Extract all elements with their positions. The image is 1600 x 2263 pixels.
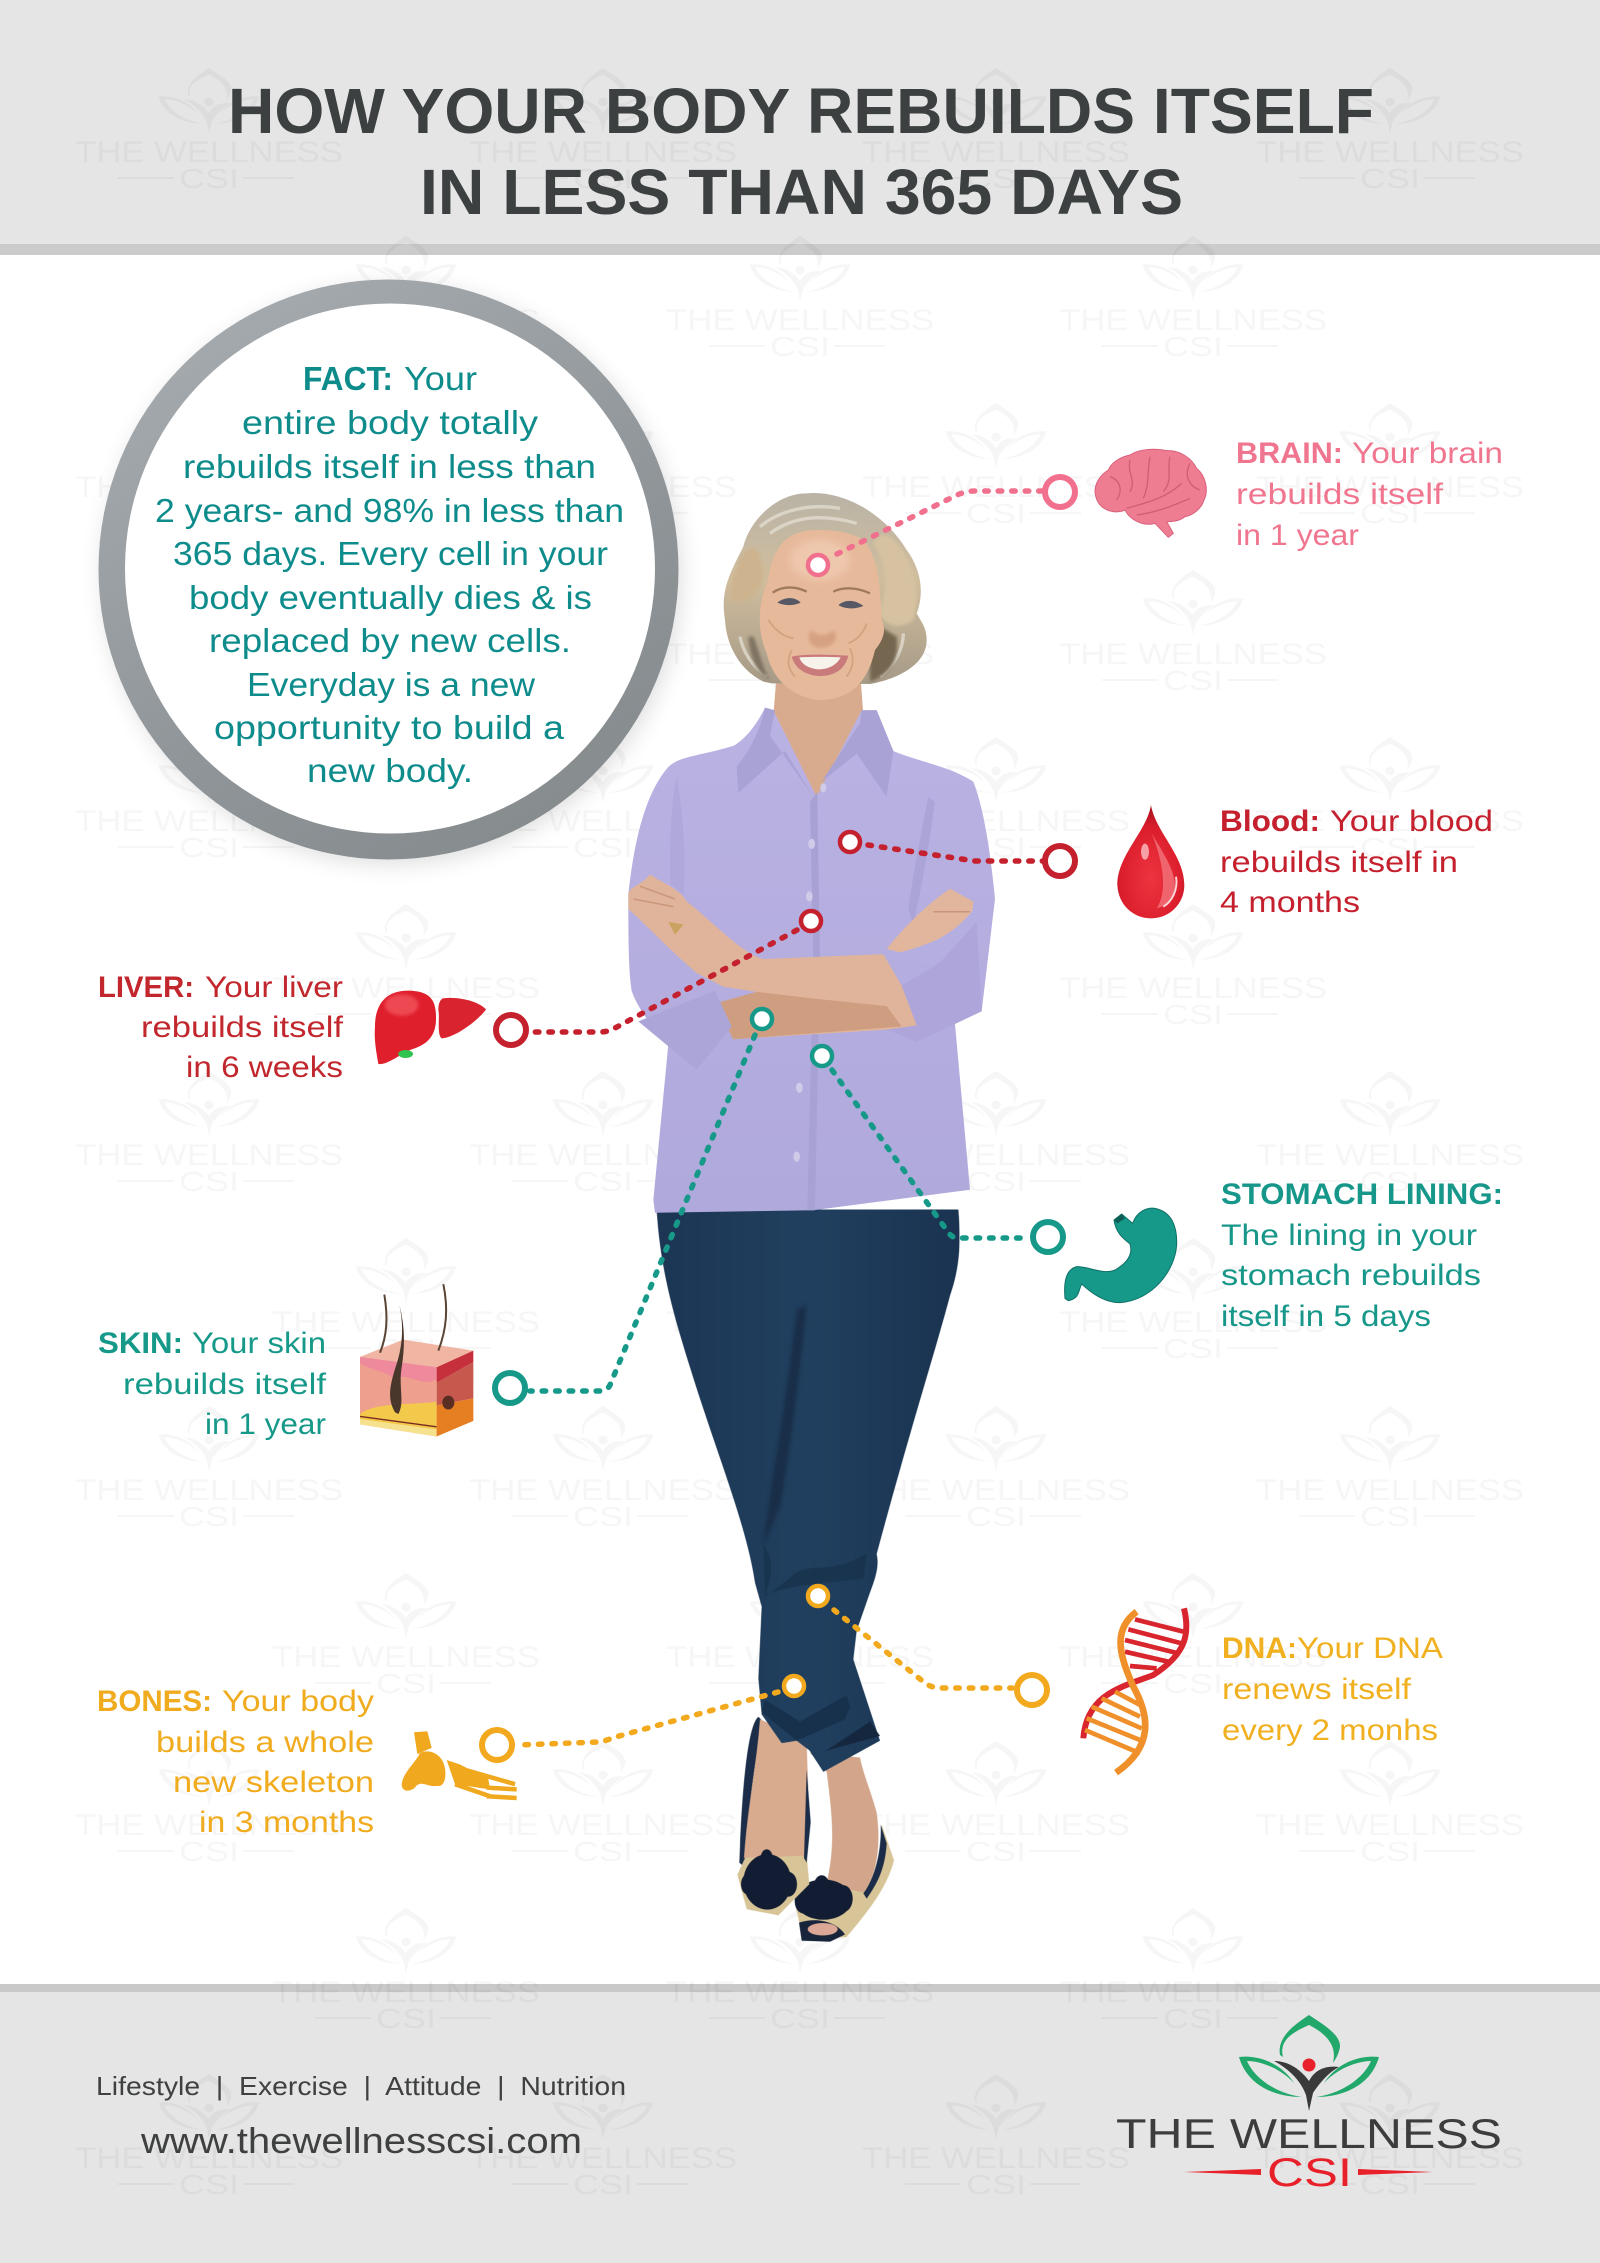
collar bbox=[737, 708, 813, 797]
watermark pattern: THE WELLNESS bbox=[862, 805, 1130, 838]
text: bones: builds a whole bbox=[156, 1726, 374, 1759]
watermark pattern: CSI bbox=[376, 999, 436, 1030]
connector: skin bbox=[495, 1009, 772, 1403]
text: blood: rebuilds itself in bbox=[1220, 846, 1458, 879]
watermark pattern: THE WELLNESS bbox=[75, 1809, 343, 1842]
watermark pattern: CSI bbox=[179, 832, 239, 863]
text: blood: Blood: bbox=[1220, 805, 1320, 838]
watermark pattern: CSI bbox=[1360, 2169, 1420, 2200]
connector: stomach bbox=[812, 1046, 1063, 1252]
fact text: FACT: bbox=[303, 360, 393, 397]
watermark pattern: CSI bbox=[1163, 2003, 1223, 2034]
text: liver: in 6 weeks bbox=[186, 1051, 343, 1084]
neck bbox=[757, 669, 877, 802]
smile bbox=[792, 655, 848, 676]
watermark pattern: THE WELLNESS bbox=[272, 1641, 540, 1674]
text: stomach: itself in 5 days bbox=[1221, 1300, 1431, 1333]
watermark pattern: THE WELLNESS bbox=[469, 1139, 737, 1172]
right cuff bbox=[887, 922, 982, 1042]
watermark pattern: CSI bbox=[1360, 832, 1420, 863]
text: stomach: The lining in your bbox=[1221, 1219, 1477, 1252]
watermark pattern: THE WELLNESS bbox=[469, 805, 737, 838]
icon: liver bbox=[375, 991, 486, 1064]
text: brain: rebuilds itself bbox=[1236, 478, 1444, 511]
watermark pattern: CSI bbox=[770, 2003, 830, 2034]
watermark pattern: CSI bbox=[376, 1668, 436, 1699]
watermark pattern: THE WELLNESS bbox=[1256, 471, 1524, 504]
watermark pattern: THE WELLNESS bbox=[469, 471, 737, 504]
watermark pattern: THE WELLNESS bbox=[75, 136, 343, 169]
text: skin bbox=[98, 1327, 327, 1441]
watermark pattern: THE WELLNESS bbox=[666, 972, 934, 1005]
text: bones: BONES: bbox=[97, 1685, 212, 1718]
watermark pattern: CSI bbox=[1360, 163, 1420, 194]
wrinkles bbox=[768, 620, 867, 677]
watermark pattern: CSI bbox=[376, 665, 436, 696]
watermark pattern: CSI bbox=[179, 1166, 239, 1197]
text: DNA: Your DNA bbox=[1297, 1632, 1443, 1665]
text: skin: rebuilds itself bbox=[123, 1368, 327, 1401]
watermark pattern: CSI bbox=[770, 665, 830, 696]
connector: blood bbox=[840, 832, 1075, 876]
watermark pattern: THE WELLNESS bbox=[666, 1306, 934, 1339]
shirt bbox=[628, 708, 995, 1213]
text: liver: rebuilds itself bbox=[141, 1011, 344, 1044]
text: blood: 4 months bbox=[1220, 886, 1360, 919]
fact text: replaced by new cells. bbox=[209, 622, 571, 659]
watermark pattern: CSI bbox=[179, 1836, 239, 1867]
text: skin: SKIN: bbox=[98, 1327, 183, 1360]
footer band bbox=[0, 1984, 1600, 2263]
watermark pattern: THE WELLNESS bbox=[666, 638, 934, 671]
text: brain: Your brain bbox=[1352, 437, 1503, 470]
watermark pattern: THE WELLNESS bbox=[469, 2142, 737, 2175]
fact text bbox=[155, 360, 624, 789]
watermark pattern: CSI bbox=[573, 2169, 633, 2200]
title bbox=[228, 75, 1374, 228]
watermark pattern: THE WELLNESS bbox=[1059, 304, 1327, 337]
watermark pattern: CSI bbox=[179, 2169, 239, 2200]
watermark pattern: THE WELLNESS bbox=[1059, 1306, 1327, 1339]
woman photo: upper body bbox=[628, 669, 995, 1213]
text: skin: Your skin bbox=[192, 1327, 326, 1360]
text: DNA: every 2 monhs bbox=[1222, 1714, 1438, 1747]
icon: brain bbox=[1095, 449, 1206, 537]
fact text: entire body totally bbox=[242, 404, 539, 441]
watermark pattern: THE WELLNESS bbox=[666, 304, 934, 337]
watermark pattern: CSI bbox=[966, 1166, 1026, 1197]
fact text: new body. bbox=[307, 752, 473, 789]
connector: brain bbox=[808, 477, 1075, 575]
watermark pattern: THE WELLNESS bbox=[862, 1474, 1130, 1507]
trousers bbox=[657, 1210, 960, 1772]
watermark pattern: THE WELLNESS bbox=[1256, 1809, 1524, 1842]
text: stomach: stomach rebuilds bbox=[1221, 1259, 1481, 1292]
watermark pattern: THE WELLNESS bbox=[1256, 136, 1524, 169]
watermark pattern: CSI bbox=[1360, 498, 1420, 529]
text: blood bbox=[1220, 805, 1493, 919]
watermark pattern: CSI bbox=[770, 331, 830, 362]
watermark pattern: CSI bbox=[966, 2169, 1026, 2200]
fact text: Everyday is a new bbox=[247, 666, 535, 703]
watermark pattern: CSI bbox=[573, 163, 633, 194]
icon: stomach bbox=[1065, 1208, 1177, 1303]
watermark pattern: THE WELLNESS bbox=[1059, 972, 1327, 1005]
watermark pattern: CSI bbox=[1163, 331, 1223, 362]
fact text: 2 years- and 98% in less than bbox=[155, 492, 624, 529]
header band bbox=[0, 0, 1600, 255]
watermark pattern: CSI bbox=[376, 331, 436, 362]
fact text: 365 days. Every cell in your bbox=[173, 535, 608, 572]
watermark pattern: THE WELLNESS bbox=[1256, 2142, 1524, 2175]
watermark pattern: THE WELLNESS bbox=[75, 1474, 343, 1507]
crossed forearms bbox=[628, 874, 918, 1039]
watermark pattern: THE WELLNESS bbox=[666, 1641, 934, 1674]
watermark pattern: CSI bbox=[1163, 665, 1223, 696]
watermark pattern: THE WELLNESS bbox=[272, 304, 540, 337]
watermark pattern: CSI bbox=[179, 1501, 239, 1532]
watermark pattern: CSI bbox=[573, 832, 633, 863]
watermark pattern: CSI bbox=[770, 1333, 830, 1364]
watermark pattern: THE WELLNESS bbox=[1256, 1474, 1524, 1507]
logo bbox=[1116, 2015, 1502, 2195]
connector: liver bbox=[496, 911, 821, 1045]
watermark pattern: THE WELLNESS bbox=[272, 1976, 540, 2009]
icon: DNA helix bbox=[1083, 1608, 1186, 1773]
text: liver: Your liver bbox=[205, 971, 343, 1004]
left foot and shoe bbox=[737, 1717, 811, 1915]
watermark pattern: THE WELLNESS bbox=[75, 471, 343, 504]
watermark pattern: THE WELLNESS bbox=[1059, 1641, 1327, 1674]
watermark pattern: THE WELLNESS bbox=[75, 1139, 343, 1172]
watermark pattern: CSI bbox=[573, 1166, 633, 1197]
text: brain: BRAIN: bbox=[1236, 437, 1343, 470]
watermark pattern: CSI bbox=[1360, 1836, 1420, 1867]
watermark pattern: THE WELLNESS bbox=[862, 1139, 1130, 1172]
watermark pattern: THE WELLNESS bbox=[1256, 805, 1524, 838]
nose bbox=[809, 630, 836, 648]
watermark pattern: CSI bbox=[966, 498, 1026, 529]
watermark pattern: THE WELLNESS bbox=[469, 1809, 737, 1842]
footer tagline: Lifestyle | Exercise | Attitude | Nutrition bbox=[96, 2071, 626, 2101]
watermark pattern: THE WELLNESS bbox=[469, 136, 737, 169]
watermark pattern: THE WELLNESS bbox=[1059, 638, 1327, 671]
watermark pattern: THE WELLNESS bbox=[862, 2142, 1130, 2175]
watermark pattern: CSI bbox=[573, 1836, 633, 1867]
text: liver: LIVER: bbox=[98, 971, 194, 1004]
watermark pattern: THE WELLNESS bbox=[75, 805, 343, 838]
woman photo: head bbox=[724, 493, 927, 700]
watermark pattern: THE WELLNESS bbox=[1059, 1976, 1327, 2009]
title: IN LESS THAN 365 DAYS bbox=[420, 156, 1183, 228]
watermark pattern: CSI bbox=[376, 1333, 436, 1364]
watermark pattern: THE WELLNESS bbox=[272, 1306, 540, 1339]
text: stomach: STOMACH LINING: bbox=[1221, 1178, 1503, 1211]
text: DNA: DNA: bbox=[1222, 1632, 1297, 1665]
text: bones: new skeleton bbox=[173, 1766, 374, 1799]
text: DNA: renews itself bbox=[1222, 1673, 1412, 1706]
logo mark bbox=[1239, 2015, 1379, 2111]
footer website: www.thewellnesscsi.com bbox=[140, 2120, 582, 2161]
watermark pattern: CSI bbox=[966, 163, 1026, 194]
watermark pattern: THE WELLNESS bbox=[862, 471, 1130, 504]
text: brain bbox=[1236, 437, 1503, 552]
text: bones: Your body bbox=[222, 1685, 374, 1718]
watermark pattern: CSI bbox=[770, 1668, 830, 1699]
watermark pattern: CSI bbox=[966, 832, 1026, 863]
left cuff bbox=[638, 991, 732, 1070]
watermark pattern: CSI bbox=[573, 1501, 633, 1532]
fact text: body eventually dies & is bbox=[189, 579, 592, 616]
watermark pattern: CSI bbox=[1163, 1668, 1223, 1699]
watermark pattern: CSI bbox=[1163, 999, 1223, 1030]
title: HOW YOUR BODY REBUILDS ITSELF bbox=[228, 75, 1374, 147]
watermark pattern: THE WELLNESS bbox=[272, 638, 540, 671]
hair bbox=[724, 493, 927, 684]
watermark pattern: CSI bbox=[966, 1501, 1026, 1532]
watermark pattern: THE WELLNESS bbox=[862, 136, 1130, 169]
watermark pattern: CSI bbox=[179, 498, 239, 529]
watermark pattern: CSI bbox=[966, 1836, 1026, 1867]
connector: bones bbox=[482, 1676, 804, 1760]
logo: THE WELLNESS bbox=[1116, 2110, 1502, 2157]
connector: DNA bbox=[808, 1586, 1047, 1705]
right foot and shoe bbox=[795, 1753, 894, 1942]
text: bones: in 3 months bbox=[199, 1806, 374, 1839]
eyebrows bbox=[773, 587, 870, 593]
watermark pattern: THE WELLNESS bbox=[469, 1474, 737, 1507]
watermark pattern: THE WELLNESS bbox=[1256, 1139, 1524, 1172]
watermark pattern: CSI bbox=[573, 498, 633, 529]
text: brain: in 1 year bbox=[1236, 519, 1359, 552]
watermark pattern: CSI bbox=[770, 999, 830, 1030]
icon: blood drop bbox=[1117, 805, 1184, 918]
watermark pattern: CSI bbox=[1360, 1166, 1420, 1197]
icon: foot bones bbox=[402, 1731, 517, 1798]
woman photo: lower body bbox=[657, 1210, 960, 1942]
watermark pattern: CSI bbox=[1163, 1333, 1223, 1364]
icon: skin block bbox=[360, 1284, 473, 1436]
watermark pattern: THE WELLNESS bbox=[75, 2142, 343, 2175]
fact text: opportunity to build a bbox=[214, 709, 565, 746]
text: stomach bbox=[1221, 1178, 1503, 1333]
face bbox=[760, 530, 884, 700]
watermark pattern: THE WELLNESS bbox=[862, 1809, 1130, 1842]
eyes bbox=[777, 598, 863, 608]
shirt buttons bbox=[793, 783, 826, 1162]
text: liver bbox=[98, 971, 344, 1084]
fact text: rebuilds itself in less than bbox=[183, 448, 596, 485]
text: blood: Your blood bbox=[1330, 805, 1493, 838]
watermark pattern: CSI bbox=[376, 2003, 436, 2034]
text: bones bbox=[97, 1685, 374, 1839]
text: DNA bbox=[1222, 1632, 1443, 1747]
watermark pattern: CSI bbox=[1360, 1501, 1420, 1532]
watermark pattern: THE WELLNESS bbox=[272, 972, 540, 1005]
watermark pattern: THE WELLNESS bbox=[666, 1976, 934, 2009]
logo: CSI bbox=[1267, 2151, 1352, 2195]
watermark pattern: CSI bbox=[179, 163, 239, 194]
fact text: Your bbox=[404, 360, 477, 397]
panel: fact circle bbox=[98, 280, 680, 863]
text: skin: in 1 year bbox=[205, 1408, 326, 1441]
